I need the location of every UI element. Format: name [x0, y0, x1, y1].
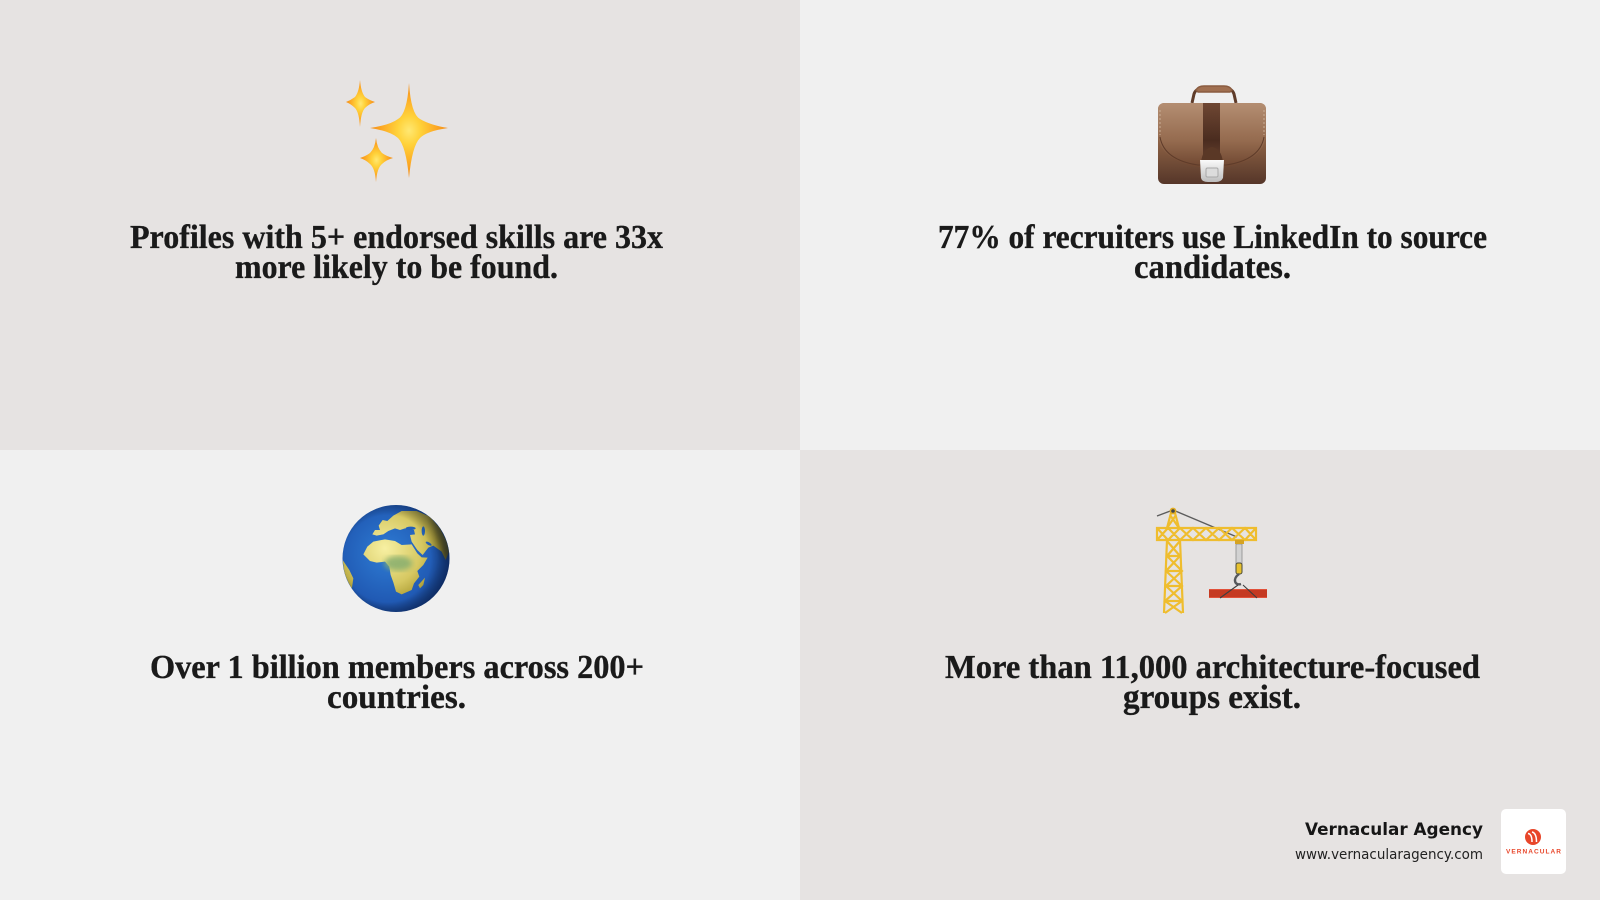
panel: architecture groups — [800, 450, 1600, 900]
logo card — [1501, 809, 1566, 874]
footer: agency name: Vernacular Agency — [1305, 820, 1483, 840]
heading: endorsed skills stat: Profiles with 5+ endorsed skills are 33x — [130, 219, 663, 256]
heading: members stat: Over 1 billion members across 200+ — [150, 649, 644, 686]
logo card: VERNACULAR — [1506, 848, 1561, 856]
heading: endorsed skills stat: more likely to be found. — [235, 249, 558, 286]
heading: recruiters stat: 77% of recruiters use LinkedIn to source — [938, 219, 1487, 256]
heading: members stat — [150, 649, 644, 716]
icon: construction crane — [1157, 508, 1267, 613]
panel: members — [151, 505, 643, 708]
heading: endorsed skills stat — [130, 219, 663, 286]
footer: website: www.vernacularagency.com — [1295, 847, 1483, 863]
icon: briefcase — [1158, 86, 1266, 184]
panel: recruiters — [800, 0, 1600, 450]
heading: architecture groups stat: More than 11,000 architecture-focused — [945, 649, 1480, 686]
heading: architecture groups stat: groups exist. — [1123, 679, 1301, 716]
icon: globe — [342, 505, 450, 612]
icon: sparkles — [346, 80, 448, 182]
heading: recruiters stat: candidates. — [1134, 249, 1291, 286]
panel: endorsed skills — [0, 0, 800, 450]
heading: recruiters stat — [938, 219, 1487, 286]
heading: architecture groups stat — [945, 649, 1480, 716]
heading: members stat: countries. — [327, 679, 466, 716]
